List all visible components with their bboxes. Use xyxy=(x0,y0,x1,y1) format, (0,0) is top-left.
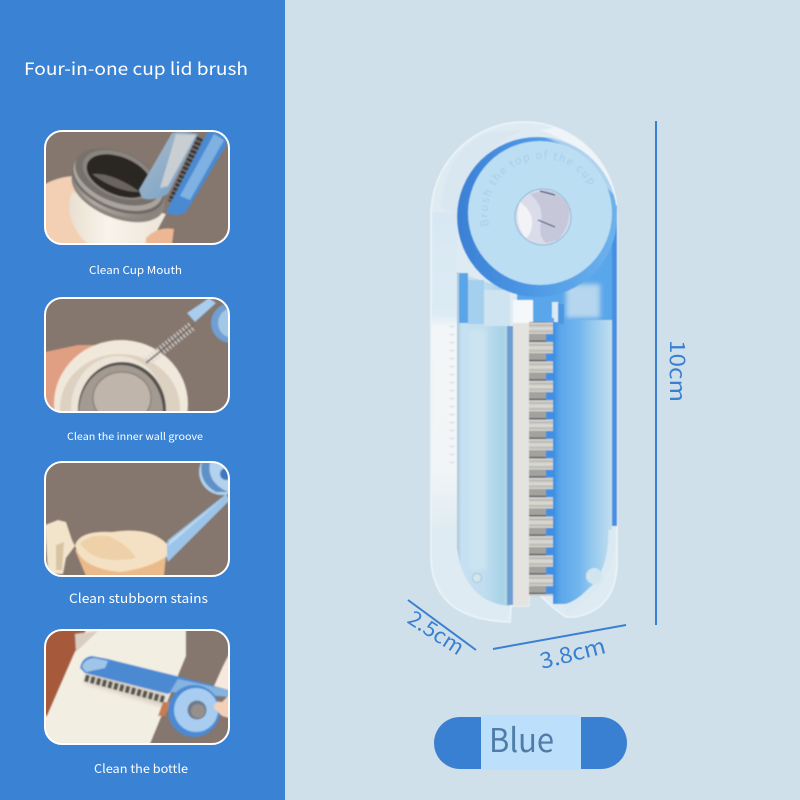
photo frame xyxy=(45,131,229,244)
photo: clean the bottle xyxy=(45,630,229,744)
blue backing behind bristles xyxy=(529,322,555,596)
wheel hole xyxy=(514,188,572,246)
white block above foam xyxy=(513,300,533,324)
brush wheel xyxy=(456,136,617,296)
dimension: height 10cm: 10cm xyxy=(663,340,693,402)
dimension: width 3.8cm: 3.8cm xyxy=(536,629,609,676)
blue divider strip xyxy=(507,326,513,605)
wheel embossed text xyxy=(488,159,598,226)
photo frame xyxy=(45,298,229,412)
left white edge with bristle marks xyxy=(432,212,457,532)
sponge foam strip xyxy=(513,323,529,606)
left translucent panel xyxy=(457,272,510,606)
colour selector pill xyxy=(434,714,627,770)
caption: clean cup mouth: Clean Cup Mouth xyxy=(89,262,182,278)
left blue panel xyxy=(0,0,285,800)
brush wheel: Brush the top of the cup xyxy=(480,150,594,226)
photo frame xyxy=(45,462,229,576)
dimension: depth 2.5cm: 2.5cm xyxy=(402,603,471,662)
bristle row xyxy=(529,322,553,596)
photo: clean inner wall groove xyxy=(44,297,230,413)
photo frame xyxy=(45,630,229,744)
dimension: width 3.8cm xyxy=(493,625,626,676)
case outer shell xyxy=(431,122,617,622)
caption: clean the bottle: Clean the bottle xyxy=(94,760,188,777)
photo: clean cup mouth xyxy=(45,131,229,244)
caption: clean stubborn stains: Clean stubborn stains xyxy=(69,588,208,607)
product: brush case xyxy=(430,121,618,623)
title: Four-in-one cup lid brush xyxy=(24,55,248,80)
right blue panel xyxy=(517,205,617,610)
case top translucent arc xyxy=(441,130,525,214)
caption: clean the inner wall groove: Clean the inner wall groove xyxy=(67,428,203,443)
right background xyxy=(285,0,800,800)
photo: clean stubborn stains xyxy=(44,461,230,577)
colour selector pill: Blue xyxy=(489,714,554,762)
